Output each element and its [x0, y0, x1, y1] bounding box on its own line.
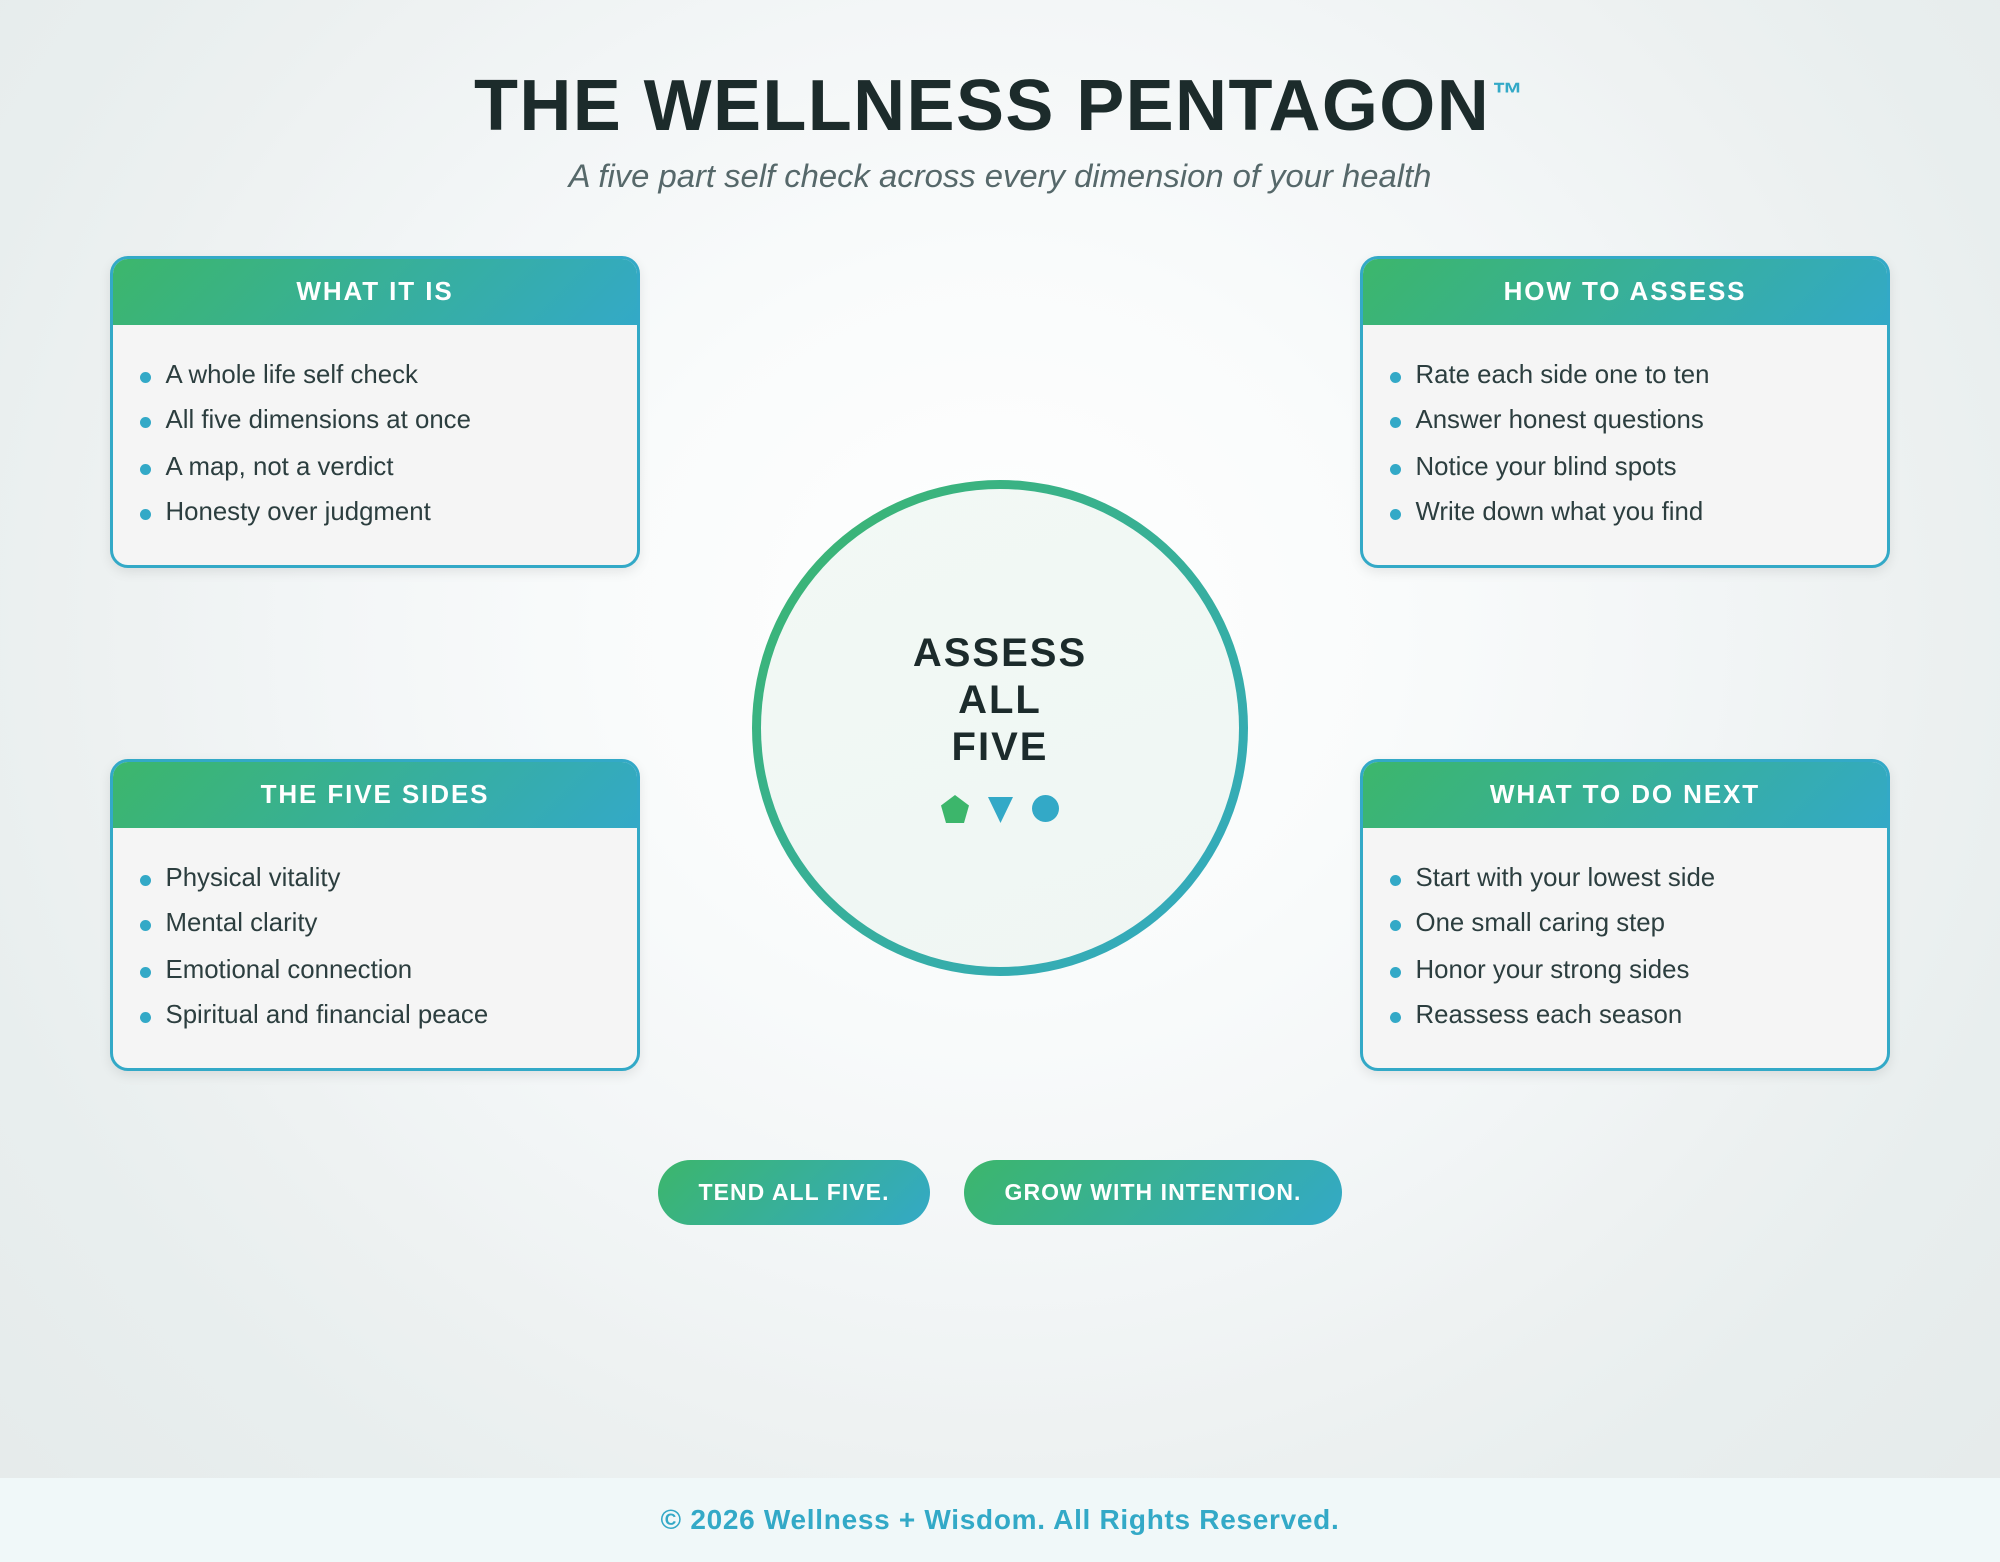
center text: ASSESS	[913, 631, 1087, 675]
heading: what it is	[113, 259, 637, 325]
panel: the five sides: Mental clarity	[166, 909, 317, 937]
panel: what to do next	[1360, 759, 1890, 1071]
panel: how to assess	[1360, 256, 1890, 568]
pill: tend all five	[658, 1160, 930, 1225]
icon: triangle	[988, 797, 1013, 823]
panel: what it is	[110, 256, 640, 568]
pill: grow with intention	[964, 1160, 1342, 1225]
heading: the five sides	[113, 762, 637, 828]
panel: the five sides: Spiritual and financial peace	[166, 1001, 488, 1029]
panel: how to assess: Write down what you find	[1416, 498, 1703, 526]
panel: the five sides: Physical vitality	[166, 864, 340, 892]
center circle	[752, 480, 1248, 976]
subtitle: A five part self check across every dimension of your health	[569, 157, 1431, 194]
center text	[913, 631, 1087, 769]
panel: how to assess: Rate each side one to ten	[1416, 361, 1710, 389]
footer	[0, 1478, 2000, 1562]
center text: FIVE	[952, 725, 1048, 769]
footer: © 2026 Wellness + Wisdom. All Rights Reserved.	[661, 1504, 1339, 1535]
panel: how to assess: Answer honest questions	[1416, 406, 1704, 434]
panel: what it is: Honesty over judgment	[166, 498, 431, 526]
heading: what to do next	[1363, 762, 1887, 828]
panel: how to assess: Notice your blind spots	[1416, 453, 1676, 481]
panel: what to do next: One small caring step	[1416, 909, 1665, 937]
icon: pentagon	[941, 795, 969, 823]
panel: the five sides	[110, 759, 640, 1071]
panel: what it is: A whole life self check	[166, 361, 418, 389]
panel: what it is: A map, not a verdict	[166, 453, 394, 481]
title: THE WELLNESS PENTAGON	[474, 66, 1490, 146]
heading: how to assess: HOW TO ASSESS	[1504, 276, 1746, 306]
panel: what to do next: Reassess each season	[1416, 1001, 1682, 1029]
heading: what it is: WHAT IT IS	[296, 276, 454, 306]
pill: grow with intention: GROW WITH INTENTION.	[1005, 1179, 1301, 1205]
panel: what it is: All five dimensions at once	[166, 406, 471, 434]
center text: ALL	[958, 678, 1042, 722]
panel: what to do next: Start with your lowest side	[1416, 864, 1715, 892]
heading: what to do next: WHAT TO DO NEXT	[1490, 779, 1760, 809]
text: ™	[1492, 76, 1523, 111]
heading: how to assess	[1363, 259, 1887, 325]
panel: what to do next: Honor your strong sides	[1416, 956, 1689, 984]
heading: the five sides: THE FIVE SIDES	[261, 779, 489, 809]
pill: tend all five: TEND ALL FIVE.	[698, 1179, 890, 1205]
panel: the five sides: Emotional connection	[166, 956, 412, 984]
icon: circle	[1032, 795, 1059, 822]
